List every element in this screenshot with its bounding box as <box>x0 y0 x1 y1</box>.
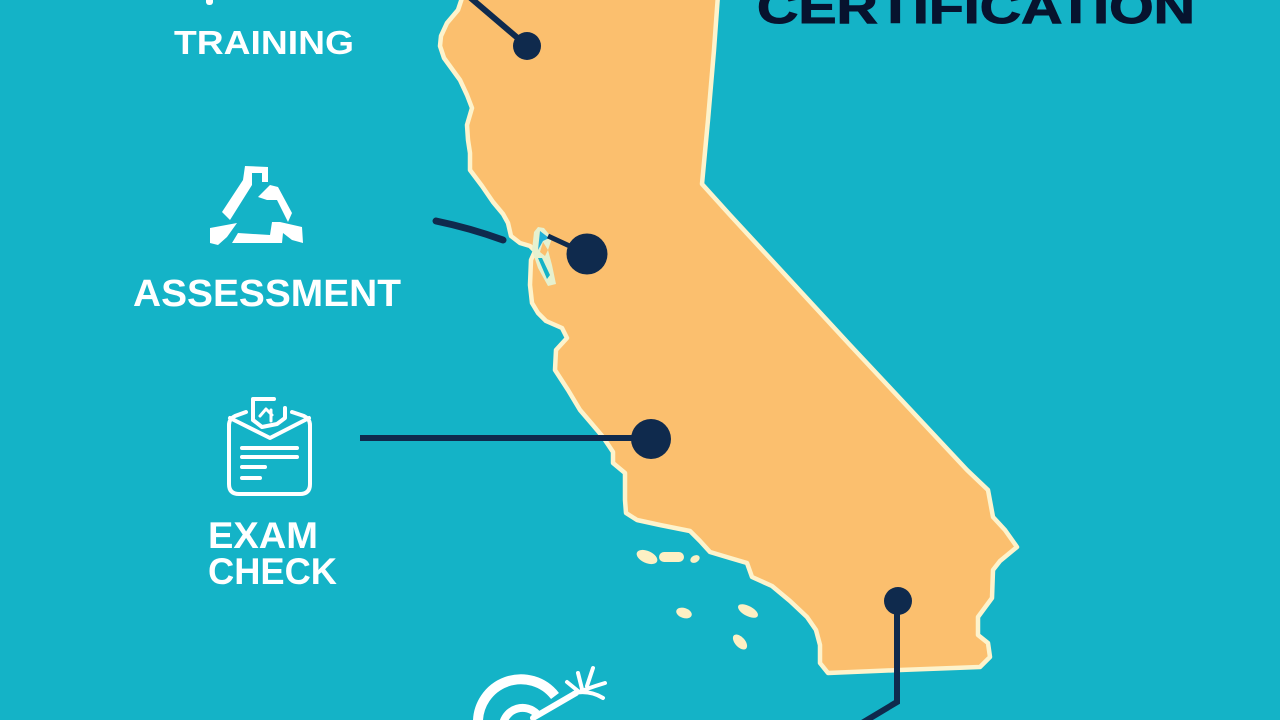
label: exam check <box>208 515 337 592</box>
label: exam check: EXAM <box>208 515 318 556</box>
label: training: TRAINING <box>174 24 354 61</box>
channel islands <box>635 547 760 652</box>
label: assessment: ASSESSMENT <box>133 273 401 315</box>
icon: assessment triangle <box>210 166 303 245</box>
connector: exam check <box>360 419 671 459</box>
icon: target with arrow <box>478 668 605 720</box>
connector: training <box>466 0 541 60</box>
connector: goal <box>862 587 912 720</box>
icon: training <box>206 0 213 5</box>
connector: assessment <box>436 221 608 274</box>
california map <box>440 0 1017 673</box>
icon: exam clipboard <box>229 399 310 494</box>
label: exam check: CHECK <box>208 551 337 592</box>
san francisco bay <box>532 227 556 286</box>
